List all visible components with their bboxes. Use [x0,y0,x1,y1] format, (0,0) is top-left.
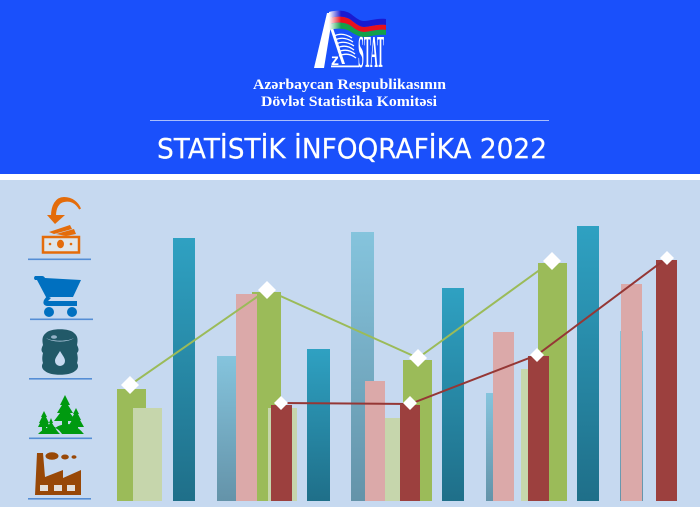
icon: forest [38,395,84,434]
bars: group 1 [117,238,195,501]
icon column [28,198,93,500]
icon: shopping cart [34,276,81,317]
header band: STAT [358,26,384,77]
green line markers [121,252,561,394]
logo: AzSTAT: z [331,52,339,69]
red trend line [281,258,667,404]
red line markers [274,251,674,410]
header band [0,0,700,174]
green trend line [130,261,552,385]
organization name [253,77,447,110]
bars: group 4 [486,226,599,501]
icon: money with arrow [43,198,80,252]
logo: AzSTAT [314,11,386,77]
bars: group 3 [351,232,464,501]
organization name: Dövlət Statistika Komitəsi [261,94,437,110]
icon: factory [35,452,81,495]
title: STATİSTİK İNFOQRAFİKA 2022 [157,132,547,165]
light panel background [0,180,700,507]
bars: group 2 [217,292,330,501]
icon: oil barrel [42,329,78,375]
bar and line chart [117,226,677,501]
bars: group 5 [620,260,677,501]
organization name: Azərbaycan Respublikasının [253,77,447,93]
